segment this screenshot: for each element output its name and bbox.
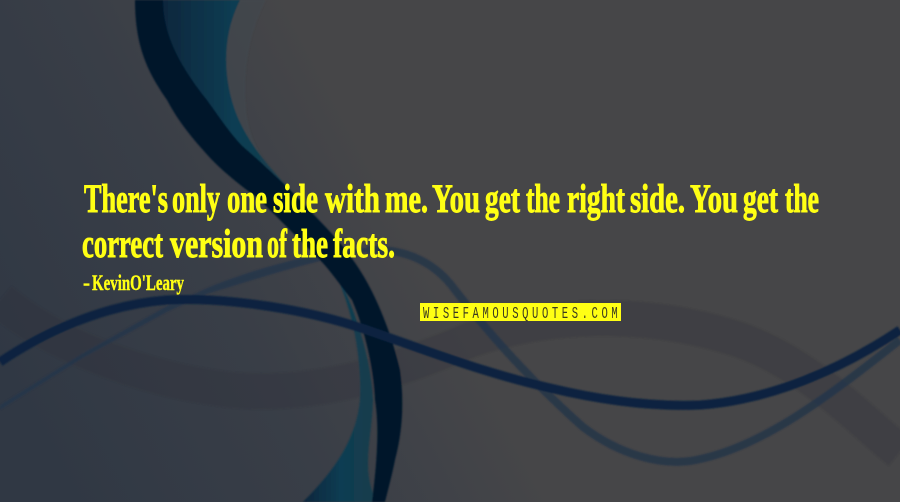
quote line 2: version	[170, 221, 263, 266]
ribbon: thin slate curve left	[0, 248, 367, 410]
ribbon: teal lower swoosh	[303, 262, 377, 502]
quote text	[82, 176, 819, 266]
attribution: KevinO'Leary	[92, 270, 184, 295]
quote line 1: only	[172, 176, 220, 221]
quote line 1: get	[485, 176, 520, 221]
quote line 2: facts.	[333, 221, 395, 266]
ribbon: main dark swoosh	[135, 0, 402, 502]
quote line 1: the	[785, 176, 819, 221]
quote line 1: You	[432, 176, 480, 221]
logo: wisefamousquotes badge: WISEFAMOUSQUOTES.COM	[423, 305, 618, 324]
ribbon: faint wide band	[0, 300, 900, 452]
quote line 2: of	[267, 221, 287, 266]
attribution	[83, 270, 184, 295]
quote line 2: the	[292, 221, 328, 266]
quote line 1	[84, 176, 819, 221]
quote line 1: get	[743, 176, 778, 221]
ribbon: teal upper swoosh	[160, 0, 305, 205]
ribbon: navy arc	[0, 300, 900, 405]
ribbon: haze beside the main swoosh	[223, 0, 300, 200]
quote line 2: correct	[82, 221, 163, 266]
quote line 1: one	[227, 176, 267, 221]
quote line 1: There's	[84, 176, 168, 221]
quote line 1: side	[273, 176, 318, 221]
quote line 1: the	[526, 176, 560, 221]
quote line 1: right	[567, 176, 625, 221]
quote line 1: with	[325, 176, 380, 221]
quote line 2	[82, 221, 395, 266]
quote line 1: me.	[385, 176, 428, 221]
ribbon: slate curve right	[367, 250, 900, 462]
quote line 1: side.	[630, 176, 685, 221]
quote line 1: You	[690, 176, 738, 221]
attribution: -	[83, 270, 90, 295]
